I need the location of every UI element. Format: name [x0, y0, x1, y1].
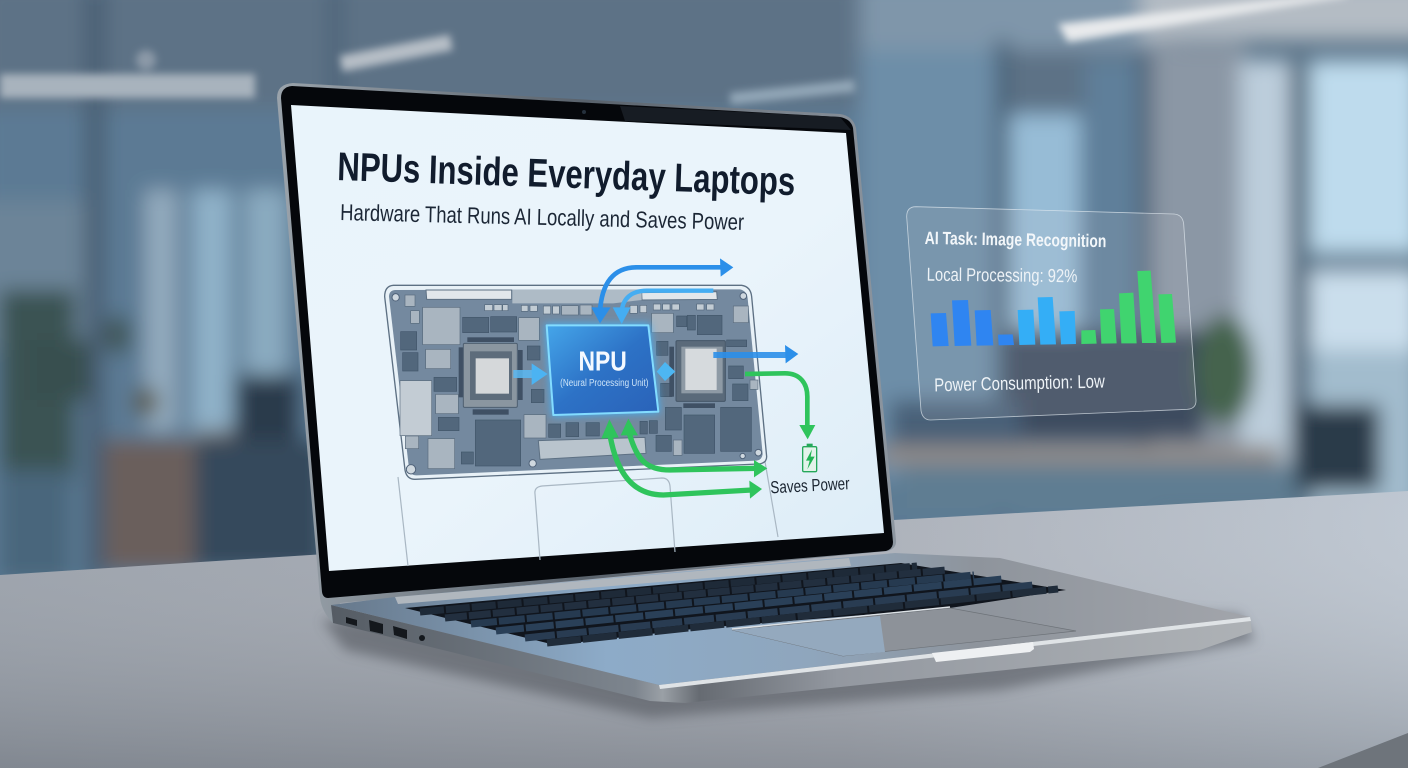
left processor	[459, 337, 523, 415]
small components row	[485, 304, 714, 314]
screen	[291, 105, 884, 571]
thumb notch	[932, 642, 1034, 662]
arrow: left processor to NPU	[513, 363, 548, 385]
board	[385, 285, 767, 479]
floating glass panel	[907, 207, 1196, 420]
bar chart	[931, 271, 1176, 346]
screen subtitle: Hardware That Runs AI Locally and Saves Power	[340, 199, 745, 235]
NPU label: NPU	[578, 346, 627, 377]
panel title: AI Task: Image Recognition	[925, 228, 1107, 251]
laptop lid	[277, 83, 896, 623]
light blue arrow: input top	[613, 291, 713, 324]
desk surface	[0, 491, 1408, 768]
keyboard	[405, 563, 1066, 645]
mounting screws	[392, 293, 762, 474]
NPU chip	[547, 325, 658, 415]
camera	[582, 110, 586, 114]
NPU sublabel: (Neural Processing Unit)	[560, 378, 648, 389]
connector diamond	[657, 362, 675, 381]
hinge strip	[395, 558, 851, 604]
light components	[400, 295, 758, 469]
laptop	[277, 83, 1252, 703]
green arrow to battery	[745, 373, 815, 439]
power consumption stat: Power Consumption: Low	[934, 370, 1105, 395]
laptop shadow on desk	[322, 600, 1255, 718]
saves power label: Saves Power	[770, 473, 850, 497]
circuit board diagram	[385, 258, 850, 499]
blue arrow: right output	[713, 345, 798, 363]
blue arrow: output top	[591, 258, 733, 323]
dark components	[401, 315, 751, 466]
NPU chip glow	[545, 323, 660, 417]
screen title: NPUs Inside Everyday Laptops	[337, 145, 796, 204]
right processor	[669, 341, 725, 408]
icon: battery	[803, 444, 817, 472]
laptop outline on screen	[398, 450, 778, 566]
local processing stat: Local Processing: 92%	[927, 264, 1078, 286]
laptop base	[331, 553, 1252, 703]
green arrow: lower outer	[601, 419, 762, 499]
green arrow: lower inner	[621, 419, 767, 477]
ports	[346, 617, 425, 641]
trackpad	[732, 608, 1076, 656]
